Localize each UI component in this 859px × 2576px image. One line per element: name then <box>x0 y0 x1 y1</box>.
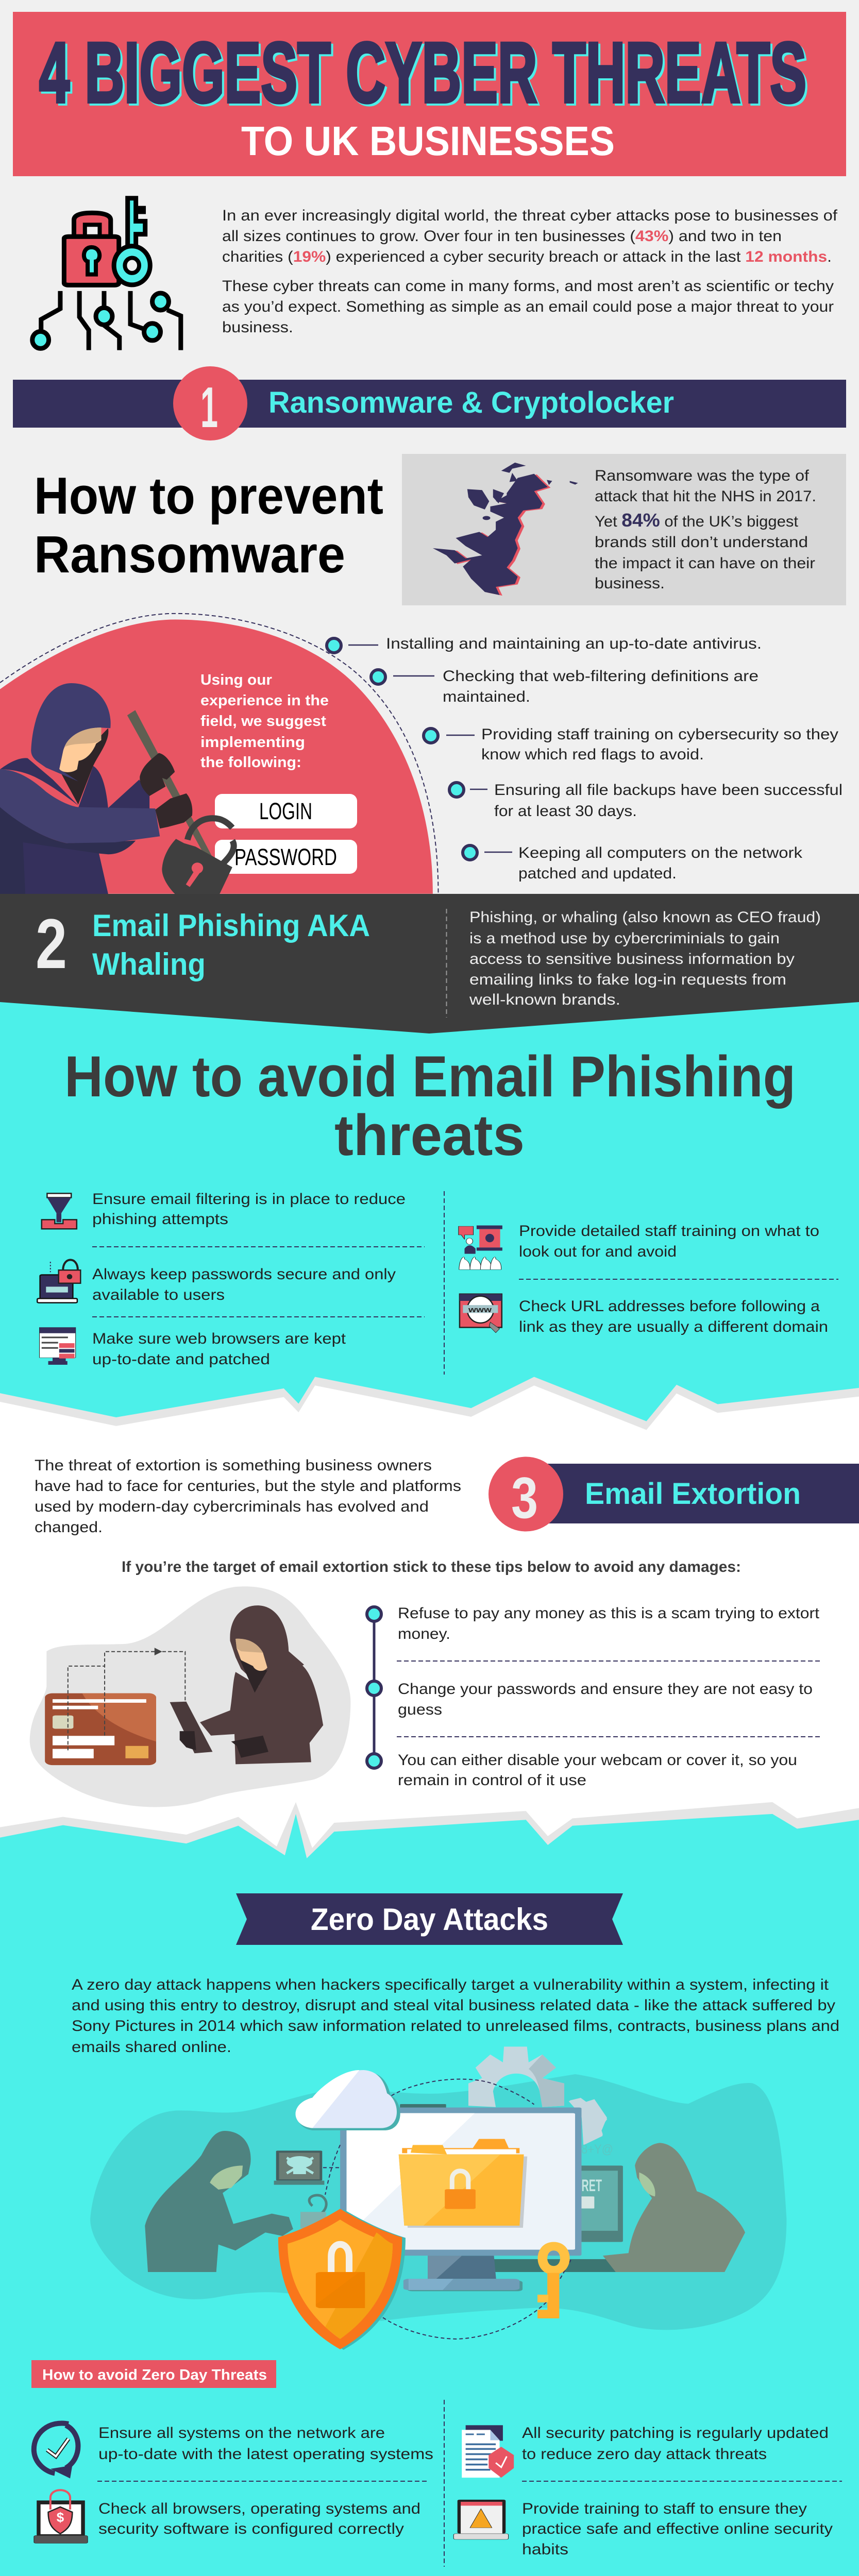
list: ransomware prevention tips <box>327 635 843 882</box>
tip: email filtering: Ensure email filtering is in place to reduce <box>92 1191 406 1208</box>
tip 4: for at least 30 days. <box>494 803 637 820</box>
secret monitor: 8+Y@ <box>581 2142 613 2157</box>
tip 2: maintained. <box>443 688 530 705</box>
tip: webcam: You can either disable your webcam or cover it, so you <box>398 1752 797 1769</box>
cyan background: zero day section <box>0 1802 859 2576</box>
tip: staff training <box>453 2500 833 2558</box>
tip 2: Checking that web-filtering definitions are <box>443 668 759 685</box>
text: extortion description: changed. <box>35 1519 103 1536</box>
illustration: hooded hacker with crowbar and padlock <box>0 683 234 894</box>
tip: refuse to pay: money. <box>398 1625 450 1642</box>
illustration: zero day attack scene <box>90 2046 786 2350</box>
tip 5: patched and updated. <box>518 865 677 882</box>
list: phishing tips <box>37 1191 838 1375</box>
text: phishing description: emailing links to fake log-in requests from <box>469 971 786 988</box>
secret monitor: SECRET <box>561 2176 602 2195</box>
text: NHS stat: business. <box>595 575 665 592</box>
intro text: charities ( 19%) experienced a cyber security breach or attack in the last 12 months . <box>222 248 832 265</box>
text: NHS stat: Ransomware was the type of <box>595 467 810 484</box>
intro text: as you’d expect. Something as simple as an email could pose a major threat to your <box>222 298 834 315</box>
icon: padlock, key and circuit <box>32 198 181 350</box>
tip: email filtering <box>42 1191 406 1229</box>
tip: systems up to date <box>34 2423 433 2479</box>
intro text: all sizes continues to grow. Over four in ten businesses ( 43%) and two in ten <box>222 228 782 245</box>
gears <box>386 2046 607 2145</box>
tip 1: Installing and maintaining an up-to-date antivirus. <box>386 635 762 652</box>
tip: passwords <box>37 1260 396 1303</box>
dashed links <box>323 2145 571 2339</box>
login box <box>215 794 357 828</box>
heading: how to avoid email phishing <box>64 1044 796 1167</box>
tip: staff training: Provide detailed staff training on what to <box>519 1223 819 1240</box>
right hacker face <box>639 2173 655 2196</box>
heading: how to prevent ransomware: Ransomware <box>34 526 345 584</box>
heading: how to avoid email phishing: How to avoid Email Phishing <box>64 1044 796 1109</box>
tip: change passwords: Change your passwords and ensure they are not easy to <box>398 1681 813 1698</box>
tip: staff training: practice safe and effective online security <box>522 2520 833 2537</box>
tip: staff training: Provide training to staff to ensure they <box>522 2500 807 2517</box>
label: how to avoid zero day threats <box>31 2360 276 2388</box>
tip: security patching: to reduce zero day attack threats <box>522 2446 767 2463</box>
text: NHS stat: Yet 84% of the UK’s biggest <box>595 510 799 531</box>
tip: passwords: available to users <box>92 1286 225 1303</box>
tip 5: Keeping all computers on the network <box>518 844 803 861</box>
shield with padlock <box>278 2209 406 2350</box>
tip: security patching <box>462 2425 829 2478</box>
text: zero day description: Sony Pictures in 2014 which saw information related to unreleased films, contracts, business plans and <box>72 2018 839 2035</box>
subheading: extortion tips: If you’re the target of email extortion stick to these tips below to avoid any damages: <box>122 1558 741 1575</box>
tip: systems up to date: Ensure all systems on the network are <box>98 2425 385 2442</box>
text: NHS stat: brands still don’t understand <box>595 534 808 551</box>
heading: how to prevent ransomware <box>34 467 383 584</box>
icon: UK map <box>433 463 578 596</box>
tip: webcam: remain in control of it use <box>398 1772 586 1789</box>
heading: email phishing <box>92 908 370 981</box>
tip: refuse to pay: Refuse to pay any money as this is a scam trying to extort <box>398 1605 820 1622</box>
tip 4: Ensuring all file backups have been successful <box>494 782 843 799</box>
tip: browsers and software <box>34 2490 420 2544</box>
heading: how to avoid email phishing: threats <box>334 1103 525 1167</box>
tip: web browsers: Make sure web browsers are kept <box>92 1330 346 1347</box>
background: white section and cyan phishing section with torn edge <box>0 979 859 1860</box>
computer screen <box>340 2108 581 2256</box>
tip 5 <box>463 844 803 882</box>
tip 3 <box>424 726 838 763</box>
heading: email phishing: Email Phishing AKA <box>92 908 370 943</box>
text: phishing description: well-known brands. <box>469 991 620 1008</box>
panel: section 2 dark band: 2 <box>36 905 67 984</box>
heading: email phishing: Whaling <box>92 947 206 981</box>
tip: passwords: Always keep passwords secure and only <box>92 1266 396 1283</box>
text: zero day description: and using this entry to destroy, disrupt and steal vital business related data - like the attack suffered by <box>72 1997 835 2014</box>
tip: email filtering: phishing attempts <box>92 1211 228 1228</box>
laptop with skull <box>274 2150 324 2185</box>
tip: check URL: link as they are usually a different domain <box>519 1318 828 1335</box>
intro text: These cyber threats can come in many forms, and most aren’t as scientific or techy <box>222 278 834 295</box>
secret monitor <box>561 2142 623 2242</box>
title banner <box>13 12 846 176</box>
tip: browsers and software: $ <box>57 2510 64 2525</box>
text: extortion description: The threat of extortion is something business owners <box>35 1457 432 1474</box>
password box <box>215 840 357 874</box>
tip: change passwords <box>367 1681 813 1718</box>
text: using our experience: implementing <box>200 734 305 751</box>
text: extortion description <box>35 1457 461 1536</box>
text: zero day description: emails shared online. <box>72 2039 231 2056</box>
text: zero day description: A zero day attack happens when hackers specifically target a vulnerability within a system, infecting it <box>72 1976 829 1993</box>
text: phishing description: is a method use by cybercriminials to gain <box>469 930 780 947</box>
timeline: extortion tips <box>367 1605 822 1789</box>
password box: PASSWORD <box>234 844 337 870</box>
tip: browsers and software: security software is configured correctly <box>98 2520 404 2537</box>
computer stand <box>403 2256 523 2291</box>
heading: how to prevent ransomware: How to prevent <box>34 467 383 525</box>
panel: pink dome with hacker <box>0 614 438 894</box>
tip: security patching: All security patching is regularly updated <box>522 2425 829 2442</box>
tip: check URL <box>460 1294 828 1335</box>
tip: browsers and software: Check all browsers, operating systems and <box>98 2500 420 2517</box>
intro text: business. <box>222 319 293 336</box>
tip 3: know which red flags to avoid. <box>481 746 704 763</box>
text: using our experience: Using our <box>200 672 272 688</box>
subtitle: TO UK BUSINESSES <box>241 118 615 164</box>
tip: refuse to pay <box>367 1605 820 1642</box>
intro text: In an ever increasingly digital world, the threat cyber attacks pose to businesses of <box>222 207 838 224</box>
tip: webcam <box>367 1752 797 1789</box>
banner: zero day attacks: Zero Day Attacks <box>311 1902 548 1937</box>
tip 4 <box>449 782 843 820</box>
text: using our experience: the following: <box>200 754 301 771</box>
tip: staff training <box>459 1223 819 1269</box>
text: NHS stat: the impact it can have on their <box>595 555 815 572</box>
small gear <box>569 2098 607 2145</box>
illustration: hacker stealing card data <box>30 1586 350 1807</box>
text: phishing description: access to sensitive business information by <box>469 951 795 968</box>
left hacker face <box>210 2165 243 2190</box>
section 3 banner <box>489 1457 859 1531</box>
tip: systems up to date: up-to-date with the latest operating systems <box>98 2446 433 2463</box>
text: NHS stat: attack that hit the NHS in 2017. <box>595 488 816 505</box>
text: extortion description: have had to face for centuries, but the style and platforms <box>35 1478 461 1495</box>
keyboard table <box>494 2259 616 2272</box>
tip: web browsers <box>40 1328 346 1368</box>
text: phishing description: Phishing, or whaling (also known as CEO fraud) <box>469 909 821 926</box>
text: extortion description: used by modern-day cybercriminals has evolved and <box>35 1498 429 1515</box>
text: NHS stat <box>595 467 816 592</box>
text: using our experience: field, we suggest <box>200 713 326 730</box>
tip 2 <box>371 668 759 705</box>
tip: web browsers: up-to-date and patched <box>92 1351 270 1368</box>
tip: change passwords: guess <box>398 1701 442 1718</box>
section 3 banner: 3 <box>511 1465 538 1530</box>
tip 3: Providing staff training on cybersecurity so they <box>481 726 838 743</box>
small laptop <box>400 2104 446 2109</box>
section 1 banner: 1 <box>200 376 218 439</box>
right hacker <box>603 2143 745 2272</box>
intro text <box>222 207 838 336</box>
list: zero day tips <box>34 2400 842 2567</box>
text: zero day description <box>72 1976 839 2056</box>
section 1 banner: Ransomware & Cryptolocker <box>268 386 674 419</box>
tip: check URL: Check URL addresses before following a <box>519 1298 820 1315</box>
background blob <box>90 2074 786 2330</box>
cloud <box>296 2070 400 2130</box>
section 3 banner: Email Extortion <box>585 1477 801 1511</box>
open padlock <box>300 2195 326 2228</box>
panel: section 2 dark band <box>0 894 859 1033</box>
folder with padlock <box>399 2139 527 2228</box>
label: how to avoid zero day threats: How to avoid Zero Day Threats <box>42 2367 267 2383</box>
panel: NHS ransomware stat <box>402 454 846 605</box>
key <box>537 2242 570 2318</box>
text: phishing description <box>469 909 821 1008</box>
left hacker <box>145 2131 293 2272</box>
tip: check URL: www <box>468 1306 492 1314</box>
section 1 banner <box>13 366 846 440</box>
tip: staff training: look out for and avoid <box>519 1243 677 1260</box>
text: using our experience <box>200 672 329 771</box>
banner: zero day attacks <box>236 1893 623 1945</box>
login box: LOGIN <box>259 798 312 824</box>
text: using our experience: experience in the <box>200 692 329 709</box>
tip: staff training: habits <box>522 2541 568 2558</box>
